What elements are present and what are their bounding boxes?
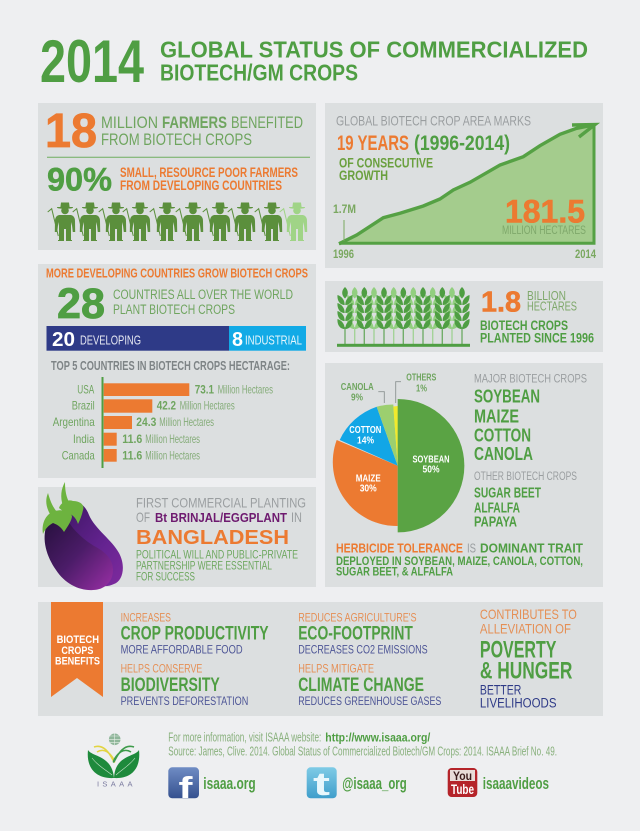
social: youtube: You [453, 769, 472, 783]
title [40, 28, 588, 95]
chart heading: (1996-2014) [414, 132, 510, 155]
callout: herbicide tolerance: DOMINANT TRAIT [480, 541, 583, 556]
text block: Bangladesh: IN [291, 509, 302, 525]
ribbon: biotech crops benefits: BIOTECH [57, 634, 99, 646]
social: facebook [168, 767, 256, 805]
split bar: developing vs industrial: 20 [52, 329, 75, 351]
list: major biotech crops: CANOLA [474, 443, 533, 464]
icon: wheat field [337, 287, 470, 347]
stat: 28 countries [57, 280, 293, 328]
bar chart: top 5 countries: Brazil [72, 398, 95, 412]
social: facebook: f [178, 770, 193, 805]
stat: 1.8 billion hectares [480, 287, 594, 346]
ribbon: biotech crops benefits [51, 602, 103, 697]
benefit: biodiversity: HELPS CONSERVE [121, 661, 202, 675]
stat: 18 million farmers: BENEFITED [231, 113, 303, 132]
panel: countries [38, 264, 316, 478]
bar chart: top 5 countries: Million Hectares [145, 432, 200, 446]
text block: Bangladesh: Bt BRINJAL/EGGPLANT [155, 510, 287, 525]
stat: 90% small farmers: FROM DEVELOPING COUNTRIES [120, 178, 282, 193]
list: other biotech crops: ALFALFA [474, 500, 520, 516]
list: major biotech crops: SOYBEAN [474, 386, 540, 407]
bar chart: top 5 countries: 11.6 [122, 450, 142, 462]
footer: source text [168, 731, 557, 759]
chart heading: TOP 5 COUNTRIES IN BIOTECH CROPS HECTARAGE: [51, 359, 290, 373]
panel: growth chart [325, 103, 603, 268]
benefit: eco-footprint: ECO-FOOTPRINT [298, 624, 413, 645]
split bar: developing vs industrial: INDUSTRIAL [245, 332, 302, 347]
pie chart [333, 372, 464, 532]
benefit: crop productivity: CROP PRODUCTIVITY [121, 624, 269, 645]
pie chart: 14% [357, 434, 375, 446]
bar chart: top 5 countries: 11.6 [122, 434, 142, 446]
split bar: developing vs industrial: DEVELOPING [80, 332, 141, 347]
stat: 90% small farmers: 90% [47, 162, 112, 198]
bar chart: top 5 countries: Million Hectares [218, 382, 273, 396]
social: youtube: isaaavideos [483, 774, 549, 793]
pie chart: 50% [422, 464, 440, 476]
ribbon: biotech crops benefits: BENEFITS [55, 656, 100, 668]
text block: Bangladesh: BANGLADESH [136, 527, 289, 549]
area chart: MILLION HECTARES [502, 225, 586, 237]
benefit: poverty and hunger: POVERTY [480, 637, 556, 664]
bar chart: top 5 countries: India [73, 432, 95, 446]
text block: Bangladesh: POLITICAL WILL AND PUBLIC-PRIVATE [136, 547, 298, 561]
benefit: climate change: REDUCES GREENHOUSE GASES [298, 694, 441, 708]
callout: herbicide tolerance: DEPLOYED IN SOYBEAN, MAIZE, CANOLA, COTTON, [336, 556, 583, 568]
stat: 1.8 billion hectares: BILLION [527, 288, 566, 303]
pie chart: OTHERS [406, 372, 436, 384]
bar chart: top 5 countries: Million Hectares [159, 415, 214, 429]
benefit: biodiversity: PREVENTS DEFORESTATION [121, 694, 248, 708]
pie chart: MAIZE [356, 472, 381, 484]
stat: 1.8 billion hectares: PLANTED SINCE 1996 [480, 331, 594, 346]
benefit: eco-footprint: DECREASES CO2 EMISSIONS [298, 643, 428, 657]
callout: herbicide tolerance: SUGAR BEET, & ALFALFA [336, 567, 453, 579]
text block: Bangladesh [136, 494, 306, 584]
stat: 1.8 billion hectares: 1.8 [481, 287, 521, 319]
social: youtube: Tube [451, 781, 474, 797]
text block: Bangladesh: FIRST COMMERCIAL PLANTING [136, 494, 306, 510]
text block: Bangladesh: PARTNERSHIP WERE ESSENTIAL [136, 558, 272, 572]
area chart: 1996 [333, 247, 354, 261]
panel heading: MORE DEVELOPING COUNTRIES GROW BIOTECH CROPS [46, 267, 308, 281]
bar chart: top 5 countries [53, 377, 273, 468]
bar chart: top 5 countries: 42.2 [157, 400, 176, 412]
area chart: 2014 [575, 247, 596, 261]
logo: ISAAA: ISAAA [97, 780, 132, 789]
callout: herbicide tolerance: HERBICIDE TOLERANCE [336, 541, 463, 556]
pie chart: 9% [351, 392, 364, 404]
benefit: poverty and hunger: ALLEVIATION OF [480, 621, 571, 637]
bar chart: top 5 countries: Million Hectares [180, 398, 235, 412]
benefit: eco-footprint [298, 610, 428, 657]
panel: crops pie [325, 363, 603, 587]
benefit: crop productivity: INCREASES [121, 610, 171, 624]
icon: eggplants [43, 482, 123, 590]
benefit: poverty and hunger: CONTRIBUTES TO [480, 606, 577, 622]
stat: 90% small farmers [47, 162, 298, 198]
pie chart: 1% [416, 383, 427, 395]
bar chart: top 5 countries: Canada [62, 448, 95, 462]
footer: source text: For more information, visit ISAAA website: [168, 731, 321, 745]
stat: 18 million farmers: FARMERS [162, 113, 227, 132]
logo: ISAAA [88, 734, 139, 789]
bar chart: top 5 countries: Million Hectares [145, 448, 200, 462]
list: major biotech crops: MAJOR BIOTECH CROPS [474, 372, 587, 386]
benefit: poverty and hunger [480, 606, 577, 710]
panel: eggplant [38, 482, 316, 590]
stat: 90% small farmers: SMALL, RESOURCE POOR FARMERS [120, 165, 298, 180]
footer: source text: http://www.isaaa.org/ [325, 731, 431, 745]
benefit: crop productivity: MORE AFFORDABLE FOOD [121, 643, 243, 657]
stat: 18 million farmers: FROM BIOTECH CROPS [101, 130, 252, 149]
benefit: climate change [298, 661, 441, 708]
pie chart: 30% [360, 483, 377, 495]
pie chart: CANOLA [341, 381, 374, 393]
list: other biotech crops: OTHER BIOTECH CROPS [474, 471, 577, 483]
bar chart: top 5 countries: Argentina [53, 415, 95, 429]
title: GLOBAL STATUS OF COMMERCIALIZED [160, 36, 588, 62]
pie chart: SOYBEAN [412, 454, 450, 466]
text block: Bangladesh: OF [136, 509, 150, 525]
bar chart: top 5 countries: USA [77, 382, 94, 396]
social: twitter [307, 766, 407, 802]
social: facebook: isaaa.org [203, 774, 256, 793]
chart heading: GROWTH [339, 167, 388, 183]
benefit: poverty and hunger: LIVELIHOODS [480, 695, 556, 710]
benefit: climate change: HELPS MITIGATE [298, 661, 374, 675]
title: 2014 [40, 28, 144, 95]
stat: 1.8 billion hectares: HECTARES [527, 299, 577, 314]
area chart [333, 124, 596, 261]
bar chart: top 5 countries: 73.1 [195, 384, 215, 396]
split bar: developing vs industrial: 8 [232, 329, 243, 351]
split bar: developing vs industrial [46, 326, 306, 351]
callout: herbicide tolerance [336, 541, 583, 579]
stat: 18 million farmers [45, 105, 303, 158]
list: other biotech crops: PAPAYA [474, 515, 517, 531]
callout: herbicide tolerance: IS [467, 541, 476, 556]
chart heading: GLOBAL BIOTECH CROP AREA MARKS [336, 113, 531, 129]
icon: row of ten farmers [48, 202, 307, 241]
list: other biotech crops [474, 471, 577, 531]
stat: 18 million farmers: 18 [45, 105, 97, 158]
area chart: 181.5 [505, 194, 585, 230]
stat: 18 million farmers: MILLION [101, 113, 158, 132]
area chart: 1.7M [333, 202, 356, 216]
benefit: climate change: CLIMATE CHANGE [298, 675, 424, 696]
chart heading: OF CONSECUTIVE [339, 155, 433, 171]
social: youtube [448, 768, 549, 797]
pie chart: COTTON [349, 424, 381, 436]
benefit: biodiversity [121, 661, 248, 708]
chart heading: 19 YEARS [337, 132, 409, 155]
panel: 1.8 billion hectares [325, 281, 603, 352]
benefit: crop productivity [121, 610, 269, 657]
text block: Bangladesh: FOR SUCCESS [136, 570, 195, 584]
panel: farmers [38, 103, 316, 250]
list: major biotech crops: COTTON [474, 424, 531, 445]
panel: benefits [38, 602, 603, 716]
social: twitter: t [313, 766, 331, 802]
ribbon: biotech crops benefits: CROPS [61, 645, 93, 657]
chart heading [336, 113, 531, 183]
bar chart: top 5 countries: 24.3 [136, 417, 156, 429]
benefit: biodiversity: BIODIVERSITY [121, 675, 220, 696]
stat: 28 countries: 28 [57, 280, 105, 328]
list: major biotech crops [474, 372, 587, 464]
stat: 28 countries: PLANT BIOTECH CROPS [113, 302, 235, 317]
benefit: poverty and hunger: BETTER [480, 683, 521, 698]
stat: 28 countries: COUNTRIES ALL OVER THE WORLD [113, 287, 293, 302]
social: twitter: @isaaa_org [342, 774, 407, 793]
list: other biotech crops: SUGAR BEET [474, 486, 541, 502]
stat: 1.8 billion hectares: BIOTECH CROPS [480, 318, 568, 333]
list: major biotech crops: MAIZE [474, 405, 519, 426]
title: BIOTECH/GM CROPS [160, 60, 358, 86]
benefit: eco-footprint: REDUCES AGRICULTURE'S [298, 610, 417, 624]
benefit: poverty and hunger: & HUNGER [480, 657, 572, 684]
